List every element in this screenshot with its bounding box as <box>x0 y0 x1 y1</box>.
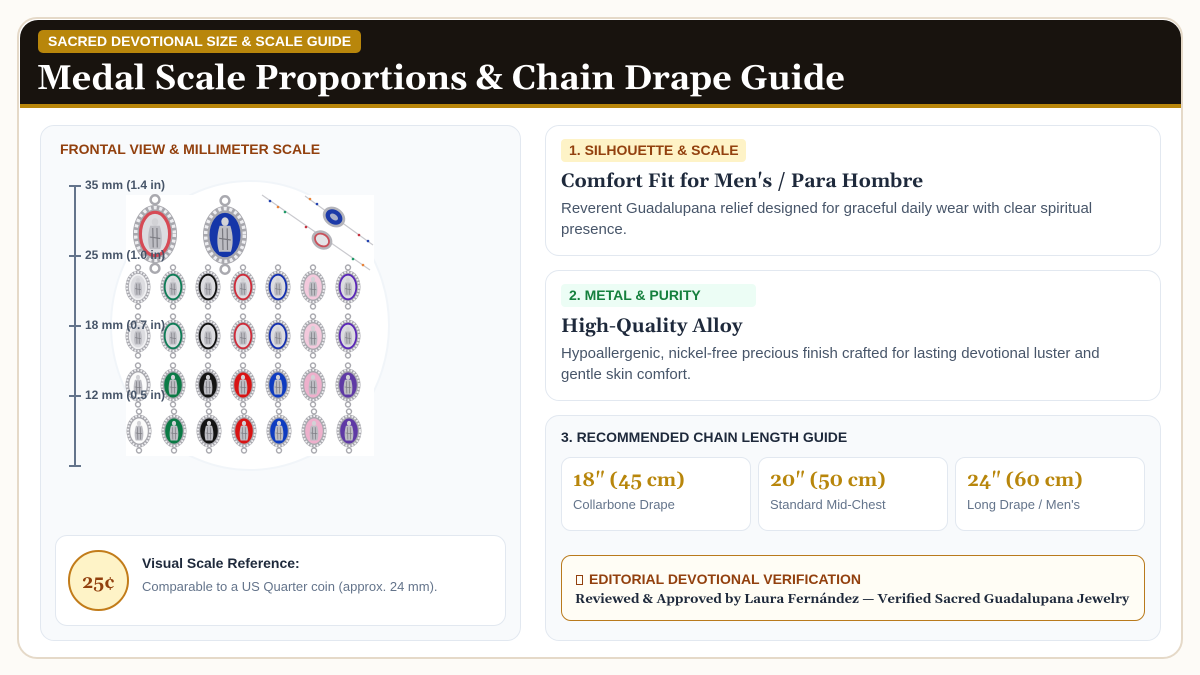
medal row 3: enamel ring medals <box>126 314 360 358</box>
title: Medal Scale Proportions & Chain Drape Guide <box>37 57 845 101</box>
icon: quarter coin <box>68 550 129 611</box>
card heading: High-Quality Alloy <box>561 315 742 339</box>
ruler label 12 mm: 12 mm (0.5 in) <box>85 388 165 402</box>
length card 18 inch: Collarbone Drape <box>573 497 675 512</box>
panel: frontal view and millimeter scale <box>40 125 521 641</box>
category chip: 2. METAL & PURITY <box>569 287 701 303</box>
product image: medals in circular backdrop <box>126 194 374 454</box>
medal row 2: enamel ring medals <box>126 265 360 309</box>
editorial verification callout <box>561 555 1145 621</box>
chain bracelets with small medals <box>262 195 373 270</box>
card heading: Comfort Fit for Men's / Para Hombre <box>561 170 923 194</box>
length card 18 inch: 18" (45 cm) <box>573 469 685 493</box>
large medals <box>133 195 247 274</box>
length card 24 inch <box>955 457 1145 531</box>
verification heading: EDITORIAL DEVOTIONAL VERIFICATION <box>589 571 861 587</box>
panel: chain length guide <box>545 415 1161 641</box>
ruler label 25 mm: 25 mm (1.0 in) <box>85 248 165 262</box>
header badge: SACRED DEVOTIONAL SIZE & SCALE GUIDE <box>48 33 351 49</box>
medal row 4: solid enamel medals <box>126 363 360 407</box>
length card 24 inch: Long Drape / Men's <box>967 497 1080 512</box>
length card 24 inch: 24" (60 cm) <box>967 469 1083 493</box>
header badge <box>38 30 361 53</box>
category chip <box>561 284 756 307</box>
panel: silhouette and scale <box>545 125 1161 256</box>
category chip <box>561 139 746 162</box>
length card 18 inch <box>561 457 751 531</box>
circular backdrop <box>111 181 389 470</box>
category chip: 1. SILHOUETTE & SCALE <box>569 142 739 158</box>
header banner <box>20 20 1181 108</box>
millimeter ruler <box>69 178 165 467</box>
panel: metal and purity <box>545 270 1161 401</box>
ruler label 18 mm: 18 mm (0.7 in) <box>85 318 165 332</box>
verification statement: Reviewed & Approved by Laura Fernández — Verified Sacred Guadalupana Jewelry <box>575 592 1129 608</box>
section heading: 3. RECOMMENDED CHAIN LENGTH GUIDE <box>561 429 847 445</box>
ruler label 35 mm: 35 mm (1.4 in) <box>85 178 165 192</box>
medal row 5: solid enamel medals <box>126 409 362 453</box>
coin scale reference card <box>55 535 506 626</box>
length card 20 inch: 20" (50 cm) <box>770 469 886 493</box>
length card 20 inch <box>758 457 948 531</box>
card body text: Reverent Guadalupana relief designed for graceful daily wear with clear spiritual presence. <box>561 200 1092 238</box>
image white area <box>126 195 374 456</box>
card body text: Hypoallergenic, nickel-free precious finish crafted for lasting devotional luster and gentle skin comfort. <box>561 345 1100 383</box>
panel heading: FRONTAL VIEW & MILLIMETER SCALE <box>60 141 320 157</box>
icon: quarter coin: 25¢ <box>82 572 115 595</box>
length card 20 inch: Standard Mid-Chest <box>770 497 886 512</box>
coin reference description: Comparable to a US Quarter coin (approx. 24 mm). <box>142 579 438 594</box>
coin reference heading: Visual Scale Reference: <box>142 555 300 571</box>
